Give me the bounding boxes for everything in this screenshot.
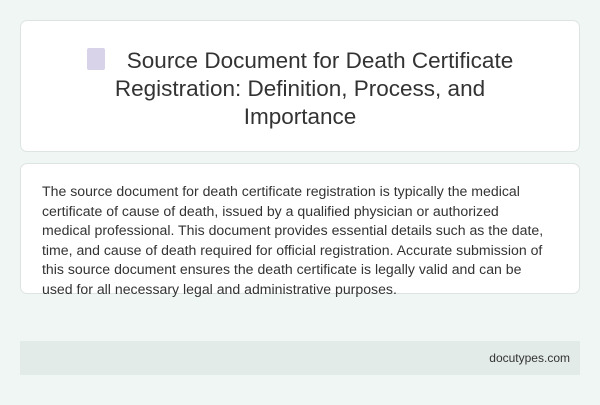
text block: The source document for death certificate registration is typically the medical certificate of cause of death, issued by a qualified physician or authorized medical professional. This document provides essential details such as the date, time, and cause of death required for official registration. Accurate submission of this source document ensures the death certificate is legally valid and can be used for all necessary legal and administrative purposes. [42,183,543,297]
icon: document [87,48,105,70]
panel: description [20,163,580,294]
footer: docutypes.com [489,351,570,365]
heading: Source Document for Death Certificate Registration: Definition, Process, and Importance [115,48,513,129]
footer [20,341,580,375]
panel: title [20,20,580,152]
